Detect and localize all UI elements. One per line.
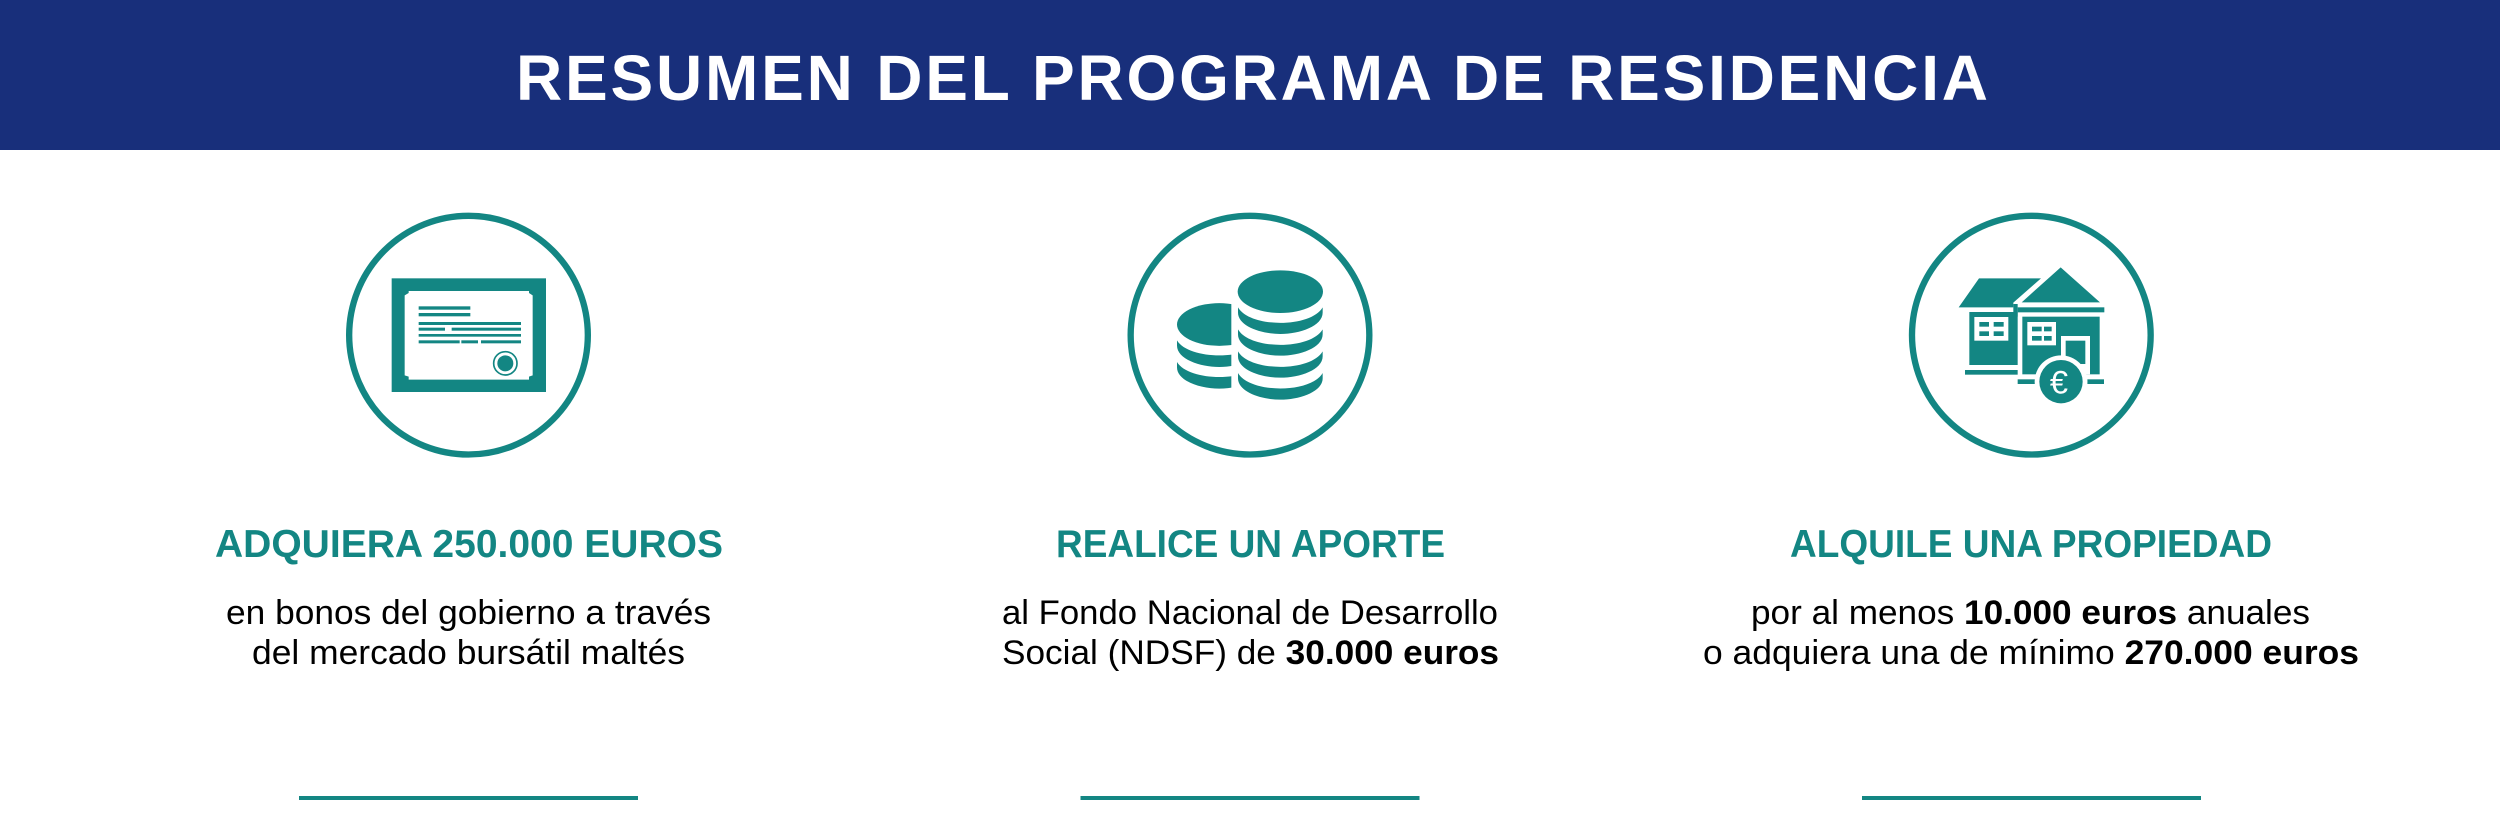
panel: contribution (1002, 216, 1499, 800)
description line 1: al Fondo Nacional de Desarrollo (1002, 594, 1498, 632)
description line 2: o adquiera una de mínimo 270.000 euros (1703, 634, 2359, 672)
description line 2: Social (NDSF) de 30.000 euros (1002, 634, 1499, 672)
panel: bonds (215, 216, 723, 800)
header band (0, 0, 2500, 150)
icon: certificate (349, 216, 588, 454)
rule (299, 796, 638, 800)
icon: houses with euro coin (1912, 216, 2151, 454)
icon: houses with euro coin: € (2050, 363, 2068, 400)
description line 1: por al menos 10.000 euros anuales (1751, 594, 2310, 632)
panel: property (1703, 216, 2359, 800)
description line 2: del mercado bursátil maltés (252, 634, 685, 672)
heading: ALQUILE UNA PROPIEDAD (1790, 523, 2272, 566)
icon: coin stacks (1131, 216, 1369, 454)
heading: ADQUIERA 250.000 EUROS (215, 523, 723, 566)
title: RESUMEN DEL PROGRAMA DE RESIDENCIA (516, 42, 1988, 114)
description line 1: en bonos del gobierno a través (226, 594, 711, 632)
heading: REALICE UN APORTE (1056, 523, 1445, 566)
rule (1862, 796, 2201, 800)
rule (1080, 796, 1420, 800)
